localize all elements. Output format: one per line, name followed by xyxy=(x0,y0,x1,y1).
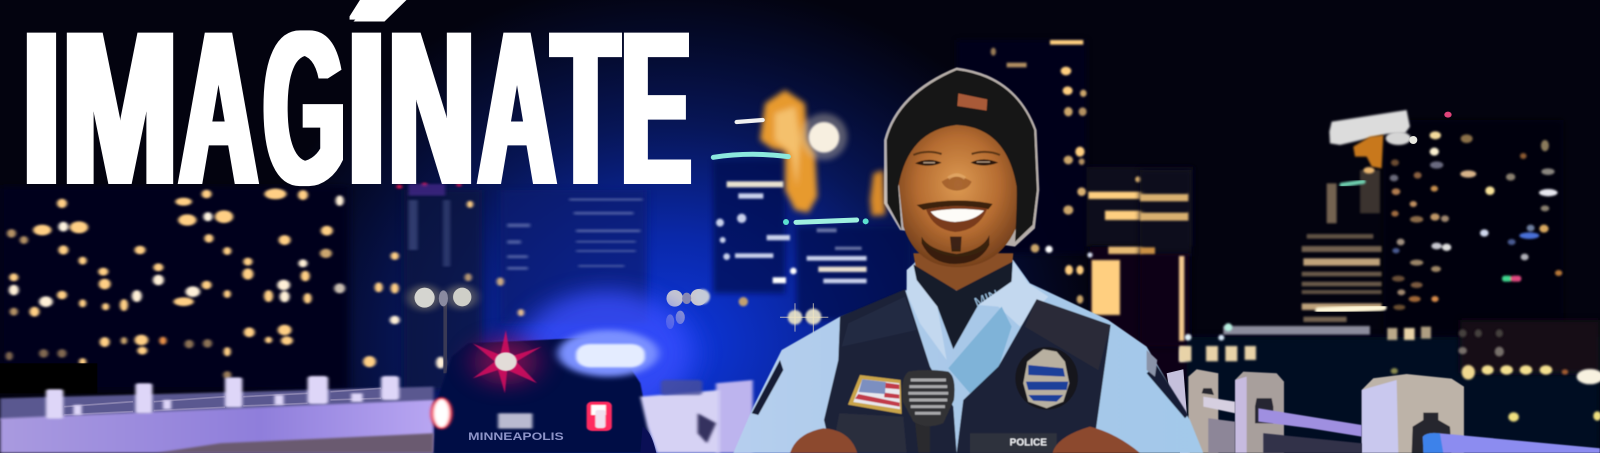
turtleneck lettering: MIN xyxy=(972,287,1001,310)
title xyxy=(22,0,691,232)
tail light left xyxy=(431,397,453,429)
smile xyxy=(917,201,993,232)
uniform shirt xyxy=(733,260,1203,453)
tail light right xyxy=(587,402,612,431)
hands xyxy=(790,427,1140,453)
car lettering: MINNEAPOLIS xyxy=(468,430,564,442)
neck xyxy=(913,253,1013,293)
rails xyxy=(1203,397,1600,453)
bridge: right railing and pillars xyxy=(1167,369,1600,453)
pillars xyxy=(1188,369,1464,453)
turtleneck xyxy=(913,262,1013,349)
right skyline xyxy=(1140,110,1600,453)
police car with lights xyxy=(431,290,753,453)
red light star xyxy=(473,330,542,393)
shoulder patches xyxy=(752,350,1188,418)
right vest panel xyxy=(957,299,1111,453)
face xyxy=(898,125,1018,267)
beanie xyxy=(887,70,1037,242)
left vest panel xyxy=(824,289,957,453)
flag patch xyxy=(848,375,902,414)
POLICE label: POLICE xyxy=(1010,438,1047,449)
beard xyxy=(922,235,989,264)
police officer xyxy=(733,67,1203,453)
street lights xyxy=(407,285,707,373)
bridge: left parapet and railing xyxy=(0,376,434,453)
badge xyxy=(1015,347,1078,410)
radio microphone xyxy=(902,370,955,453)
blue light bar xyxy=(558,330,659,377)
nose xyxy=(942,177,972,191)
left skyline buildings xyxy=(0,183,647,393)
eyes and brows xyxy=(913,152,1000,166)
downtown towers and golden tower xyxy=(695,40,1193,380)
collar xyxy=(907,262,1048,360)
hat rim light xyxy=(884,67,1039,247)
